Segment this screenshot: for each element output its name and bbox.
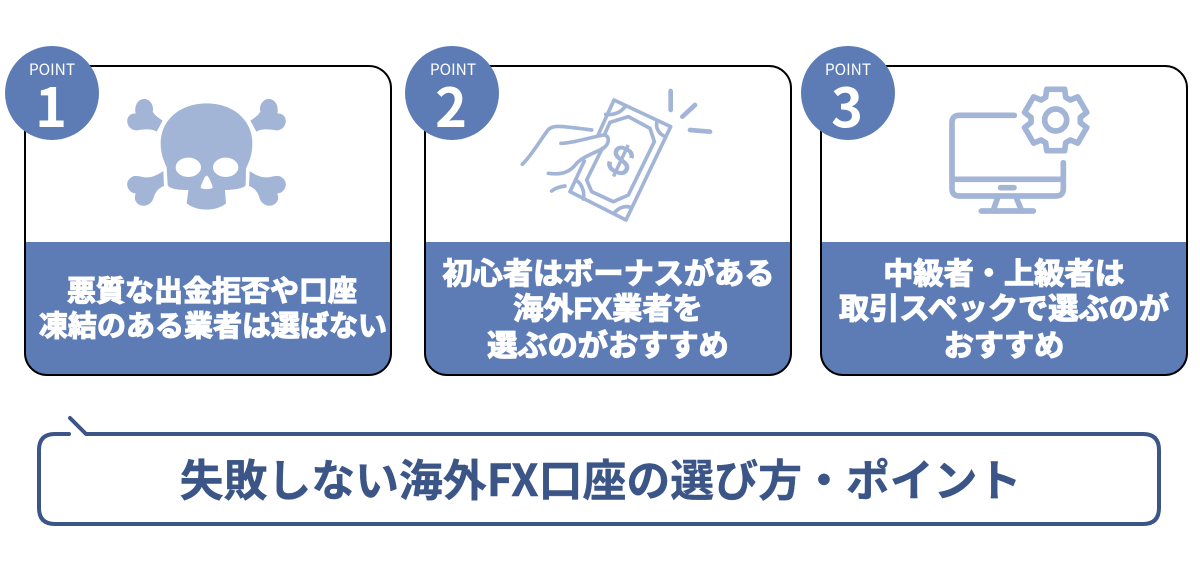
- caption: 取引スペックで選ぶのが: [839, 291, 1169, 326]
- caption: 凍結のある業者は選ばない: [39, 310, 387, 343]
- badge: point 2: [405, 46, 499, 143]
- callout: title: [39, 418, 1159, 524]
- icon: skull and crossbones: [127, 99, 286, 210]
- panel: point 3: [821, 66, 1187, 375]
- caption: 海外FX業者を: [513, 292, 703, 326]
- caption: 初心者はボーナスがある: [442, 256, 775, 291]
- panel: point 1: [25, 66, 391, 375]
- icon: monitor with gear: [952, 89, 1087, 211]
- caption: 悪質な出金拒否や口座: [67, 275, 357, 308]
- badge: point 1: [5, 46, 99, 143]
- caption: 選ぶのがおすすめ: [487, 328, 729, 363]
- caption: おすすめ: [944, 330, 1064, 363]
- badge: point 1: POINT: [29, 58, 75, 80]
- icon: hand holding banknote: [522, 91, 710, 220]
- badge: point 1: 1: [35, 64, 67, 143]
- panel: point 2: [425, 66, 791, 375]
- title: 失敗しない海外FX口座の選び方・ポイント: [180, 445, 1021, 509]
- icon: hand holding banknote: $: [600, 134, 641, 186]
- caption: 中級者・上級者は: [883, 257, 1125, 291]
- badge: point 2: 2: [435, 64, 467, 143]
- badge: point 2: POINT: [430, 58, 476, 80]
- badge: point 3: POINT: [825, 58, 871, 80]
- badge: point 3: [801, 46, 895, 143]
- badge: point 3: 3: [831, 64, 863, 143]
